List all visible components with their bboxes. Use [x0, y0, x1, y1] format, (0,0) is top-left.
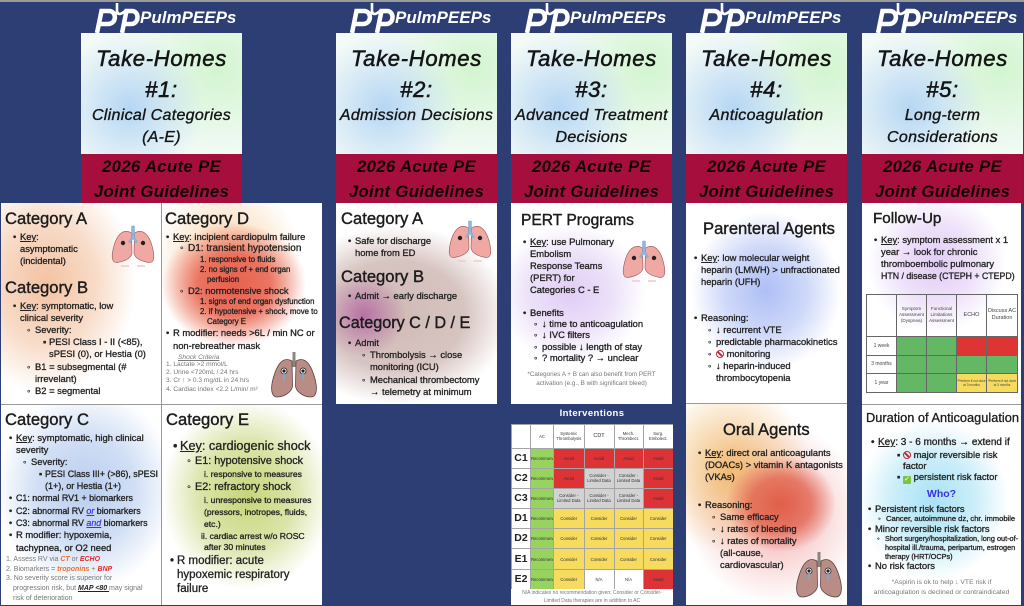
guideline banner: 2026 Acute PE: [532, 157, 651, 176]
text: category E details: hypoxemic respiratory: [177, 569, 289, 581]
guideline banner: 2026 Acute PE: [883, 157, 1002, 176]
text: category B details: B2 = segmental: [35, 385, 100, 396]
heading: category C: Category C: [5, 410, 89, 429]
table: interventions: Consider: [591, 557, 607, 562]
text: oral reasoning: Reasoning:: [705, 499, 752, 510]
text: follow-up key: Key: symptom assessment x 1: [881, 234, 1008, 245]
logo: [862, 2, 1023, 33]
text: category C details: PESI Class III+ (>86), sPESI: [45, 469, 158, 479]
table: interventions: Avoid: [653, 476, 663, 481]
text: category C D E: Admit: [355, 337, 379, 348]
table: interventions: Avoid: [623, 456, 634, 461]
header: take-homes 2: [336, 3, 497, 203]
text: category C notes: [6, 556, 143, 602]
text: category C details: C1: normal RV1 + biomarkers: [16, 493, 133, 503]
text: PERT note: activation (e.g., B with significant bleed): [536, 380, 647, 386]
text: category B details: B1 = subsegmental (#: [35, 361, 126, 372]
title card 3: Take-Homes: [526, 46, 657, 71]
text: risk factors: Persistent risk factors: [875, 503, 965, 514]
text: risk factors: No risk factors: [875, 560, 935, 571]
logo: PulmPEEPs: [570, 8, 666, 27]
heading: category B: Category B: [5, 278, 88, 297]
title card 4: #4:: [750, 77, 783, 102]
table: interventions: [511, 424, 673, 589]
text: category C D E: monitoring (ICU): [370, 361, 439, 372]
table: follow-up schedule: Symptom Assessment (Dyspnea): [899, 306, 924, 323]
panel: duration of anticoagulation: [862, 405, 1021, 605]
text: category B details: irrevelant): [35, 373, 77, 384]
text: parenteral reasoning: Reasoning:: [701, 312, 748, 323]
text: category C notes: 1. Assess RV via CT or ECHO: [6, 556, 100, 563]
table: follow-up schedule: 1 week: [874, 342, 889, 348]
table: follow-up schedule: Discuss AC Duration: [988, 308, 1016, 321]
guideline banner: [511, 154, 672, 203]
text: category B details: sPESI (0), or Hestia (0): [49, 348, 146, 359]
text: PERT key: Key: use Pulmonary: [530, 236, 614, 247]
table: interventions: Consider: [560, 516, 577, 521]
title card 5: Considerations: [887, 129, 998, 146]
heading: category E: Category E: [166, 410, 249, 429]
text: category A key: [20, 231, 78, 243]
text: category D details: 1. signs of end organ dysfunction: [200, 297, 314, 306]
heading: category C D E: Category C / D / E: [339, 314, 470, 332]
text: category D details: Key: incipient cardiopulm failure: [173, 231, 305, 242]
text: category C details: R modifier: hypoxemia,: [16, 529, 112, 540]
text: category E details: [170, 439, 312, 595]
text: category C notes: 2. Biomarkers = troponins + BNP: [6, 566, 112, 573]
title card 3: [511, 33, 672, 154]
text: duration key: major reversible risk: [914, 449, 997, 460]
text: category E details: ii. cardiac arrest w/o ROSC: [201, 531, 305, 541]
heading: parenteral agents: Parenteral Agents: [703, 219, 835, 238]
text: duration key: ✓: [904, 476, 910, 483]
text: benefits: ↓ IVC filters: [542, 329, 590, 340]
text: risk factors: therapy (HRT/OCPs): [885, 552, 953, 561]
table: interventions: Avoid: [653, 577, 663, 582]
guideline banner: Joint Guidelines: [94, 182, 229, 201]
panel: parenteral agents: heparin (LMWH) > unfractionated: [701, 264, 840, 275]
text: category C details: Key: symptomatic, high clinical: [16, 432, 144, 443]
text: category B details: clinical severity: [20, 312, 83, 323]
title card 4: Anticoagulation: [710, 107, 823, 124]
heading: category D: Category D: [165, 209, 249, 228]
heading: PERT programs: PERT Programs: [521, 212, 634, 229]
heading: oral agents: Oral Agents: [723, 420, 810, 439]
title card 1: [81, 33, 242, 154]
text: category D details: D2: normotensive shock: [188, 285, 289, 296]
text: category B: Admit → early discharge: [355, 290, 457, 301]
text: shock criteria: Shock Criteria: [178, 354, 219, 361]
title card 2: #2:: [400, 77, 433, 102]
panel: PERT programs: Embolism: [530, 248, 571, 259]
text: category E details: R modifier: acute: [177, 555, 264, 567]
guideline banner: [81, 154, 242, 203]
panel: categories A and B: asymptomatic: [20, 243, 78, 254]
title card 1: (A-E): [142, 129, 181, 146]
panel: category C: [1, 405, 161, 605]
guideline banner: Joint Guidelines: [524, 182, 659, 201]
text: category E details: after 30 minutes: [204, 542, 266, 552]
table: interventions: Avoid: [653, 496, 663, 501]
table: interventions: Avoid: [564, 456, 574, 461]
text: benefits: ↓ time to anticoagulation: [542, 318, 643, 329]
panel: categories A and B: (incidental): [20, 255, 66, 266]
panel: admission decisions: [336, 203, 497, 404]
panel: categories A and B: [1, 203, 161, 404]
table: follow-up schedule: [866, 294, 1018, 393]
logo: PulmPEEPs: [395, 8, 491, 27]
table: interventions: Consider: [560, 557, 577, 562]
text: oral key: Key: direct oral anticoagulants: [705, 447, 831, 458]
table: interventions: Consider - Limited Data: [587, 493, 611, 503]
guideline banner: 2026 Acute PE: [102, 157, 221, 176]
table: interventions: Consider - Limited Data: [587, 473, 611, 483]
panel: parenteral agents: heparin (UFH): [701, 276, 760, 287]
panel: oral agents: (DOACs) > vitamin K antagonists: [705, 459, 843, 470]
header: take-homes 4: [686, 3, 847, 203]
text: category C details: Severity:: [31, 456, 67, 467]
table: interventions: Consider: [560, 577, 577, 582]
table: interventions: Avoid: [594, 456, 604, 461]
text: PERT note: *Categories A + B can also benefit from PERT: [527, 371, 656, 378]
panel: PERT programs: Categories C - E: [530, 284, 599, 295]
text: duration key: Key: 3 - 6 months → extend if: [878, 437, 1010, 448]
table: interventions: Avoid: [564, 476, 574, 481]
text: category D details: D1: transient hypotension: [188, 243, 301, 254]
title card 1: #1:: [145, 77, 178, 102]
heading: interventions: Interventions: [560, 408, 624, 419]
text: benefits: Benefits: [530, 307, 564, 318]
text: category E details: i. unresponsive to measures: [204, 495, 311, 505]
logo: [81, 2, 242, 33]
text: risk factors: Cancer, autoimmune dz, chr. immobile: [886, 514, 1015, 523]
table: follow-up schedule: 3 months: [871, 361, 892, 367]
icon: sad lungs: [796, 552, 842, 598]
table: interventions: C3: [514, 492, 528, 504]
header: take-homes 5: [862, 3, 1023, 203]
panel: oral agents: (VKAs): [705, 471, 735, 482]
text: oral reasoning: [698, 499, 797, 570]
text: category C details: C3: abnormal RV and biomarkers: [16, 518, 148, 528]
text: category C details: (1+), or Hestia (1+): [45, 481, 121, 491]
table: interventions: Consider - Limited Data: [617, 493, 640, 503]
text: category C details: severity: [16, 444, 48, 455]
text: oral reasoning: cardiovascular): [720, 559, 784, 570]
text: parenteral reasoning: monitoring: [727, 348, 770, 359]
logo: PulmPEEPs: [140, 8, 236, 27]
table: interventions: Consider - Limited Data: [617, 473, 640, 483]
text: PERT note: [527, 371, 656, 386]
guideline banner: Joint Guidelines: [875, 182, 1010, 201]
title card 3: Decisions: [555, 129, 628, 146]
panel: category D: [162, 203, 322, 404]
text: benefits: ? mortality ? → unclear: [542, 352, 638, 363]
text: table footnote: [511, 589, 673, 605]
text: aspirin note: [874, 579, 1009, 596]
table: interventions: AC: [539, 434, 545, 439]
panel: admission decisions: home from ED: [355, 247, 415, 258]
text: category E details: etc.): [204, 519, 221, 529]
panel backing: column 4: [686, 203, 847, 605]
table: interventions: Surg. Embolect.: [649, 431, 668, 441]
text: benefits: [523, 307, 643, 364]
logo: [686, 2, 847, 33]
table: interventions: Consider - Limited Data: [557, 493, 580, 503]
table: interventions: Mech. Thrombect.: [618, 431, 639, 441]
table: interventions: C2: [514, 472, 528, 484]
text: duration key: factor: [903, 460, 926, 471]
text: table footnote: N/A indicates no recommendation given; Consider or Consider-: [522, 590, 662, 596]
logo: PulmPEEPs: [921, 8, 1017, 27]
text: category A: Safe for discharge: [355, 235, 431, 246]
text: category D details: 2. no signs of + end organ: [200, 265, 290, 274]
table: interventions: Consider: [650, 536, 667, 541]
text: category C D E: Thrombolysis → close: [370, 349, 462, 360]
text: oral reasoning: ↓ rates of mortality: [720, 535, 797, 546]
text: oral reasoning: ↓ rates of bleeding: [720, 523, 797, 534]
text: category B details: [13, 300, 146, 396]
table: interventions: D2: [514, 532, 528, 544]
text: risk factors: [868, 503, 1018, 571]
panel: parenteral agents: [686, 203, 847, 403]
text: category A key: Key:: [20, 231, 39, 242]
text: risk factors: hospital ill./trauma, peripartum, estrogen: [885, 543, 1015, 552]
guideline banner: Joint Guidelines: [699, 182, 834, 201]
guideline banner: [336, 154, 497, 203]
top edge: [0, 0, 1024, 2]
panel: interventions table: [511, 404, 673, 605]
text: category D details: 1. responsive to fluids: [200, 255, 275, 264]
table: interventions: Consider: [620, 536, 637, 541]
text: shock criteria: 2. Urine <720mL / 24 hrs: [166, 369, 239, 376]
text: category E details: (pressors, inotropes, fluids,: [204, 507, 307, 517]
guideline banner: 2026 Acute PE: [707, 157, 826, 176]
table: interventions: E1: [515, 553, 527, 565]
heading: category B: Category B: [341, 267, 424, 286]
table: interventions: Consider: [620, 516, 637, 521]
icon: happy lungs: [622, 240, 666, 282]
table: follow-up schedule: *Perform if not done at 3 months: [957, 378, 986, 386]
header: take-homes 3: [511, 3, 672, 203]
table: interventions: Consider: [591, 516, 607, 521]
table: interventions: N/A: [625, 577, 632, 582]
table: interventions: D1: [514, 512, 528, 524]
text: category C notes: risk of deterioration: [13, 595, 73, 602]
logo: [336, 2, 497, 33]
text: risk factors: Minor reversible risk factors: [875, 523, 990, 534]
text: parenteral reasoning: predictable pharmacokinetics: [716, 336, 837, 347]
table: interventions: Consider: [620, 557, 637, 562]
text: category D details: non-rebreather mask: [173, 340, 260, 351]
text: aspirin note: anticoagulation is declined or contraindicated: [874, 588, 1009, 596]
heading: duration of anticoagulation: Duration of Anticoagulation: [866, 410, 1019, 425]
title card 5: [862, 33, 1023, 154]
heading: follow-up: Follow-Up: [873, 210, 941, 227]
table: interventions: E2: [515, 573, 527, 585]
icon: sad lungs: [271, 352, 317, 398]
text: category C details: C2: abnormal RV or biomarkers: [16, 506, 141, 516]
title card 1: Clinical Categories: [92, 107, 231, 124]
panel backing: column 5: [862, 203, 1021, 605]
table: interventions: Consider: [650, 516, 667, 521]
text: parenteral key: Key: low molecular weight: [701, 252, 809, 263]
logo: PulmPEEPs: [745, 8, 841, 27]
text: category C D E: [348, 337, 480, 398]
table: interventions: Consider: [591, 536, 607, 541]
title card 3: Advanced Treatment: [515, 107, 668, 124]
table: follow-up schedule: 1 year: [875, 380, 888, 386]
title card 2: [336, 33, 497, 154]
text: duration key: [871, 437, 1010, 484]
text: category E details: failure: [177, 583, 208, 595]
table: follow-up schedule: ECHO: [964, 312, 979, 318]
text: aspirin note: *Aspirin is ok to help ↓ VTE risk if: [892, 579, 991, 586]
text: parenteral reasoning: [694, 312, 838, 384]
heading: category A: Category A: [5, 209, 87, 228]
title card 4: [686, 33, 847, 154]
title card 2: Admission Decisions: [340, 107, 493, 124]
heading: who: Who?: [927, 488, 956, 500]
text: category D details: R modifier: needs >6L / min NC or: [173, 327, 315, 338]
text: shock criteria: 4. Cardiac index <2.2 L/min/ m²: [166, 386, 258, 393]
text: category E details: E2: refractory shock: [195, 481, 291, 493]
panel: follow-up: year → look for chronic: [881, 246, 977, 257]
table: interventions: N/A: [596, 577, 602, 582]
heading: interventions: [511, 404, 673, 424]
text: category C notes: 3. No severity score is superior for: [6, 575, 112, 582]
text: category D details: [166, 231, 318, 351]
panel backing: column 1: [1, 203, 322, 605]
text: category B details: Severity:: [35, 324, 71, 335]
table: follow-up schedule: *Perform if not done at 3 months: [988, 378, 1016, 386]
text: shock criteria: [166, 354, 258, 393]
text: category B details: PESI Class I - II (<85),: [49, 336, 143, 347]
text: parenteral reasoning: ↓ heparin-induced: [716, 360, 791, 371]
title card 5: Take-Homes: [877, 46, 1008, 71]
panel: PERT programs: Response Teams: [530, 260, 602, 271]
icon: happy lungs: [112, 226, 154, 267]
title card 1: Take-Homes: [96, 46, 227, 71]
panel: follow-up: [862, 203, 1021, 404]
text: risk factors: Short surgery/hospitalization, long out-of-: [885, 534, 1018, 543]
table: interventions: Consider: [560, 536, 577, 541]
text: shock criteria: 3. Cr ↑ > 0.3 mg/dL in 24 hrs: [166, 377, 249, 384]
text: category E details: i. responsive to measures: [204, 469, 302, 479]
text: category D details: perfusion: [207, 275, 239, 284]
text: category C notes: progression risk, but MAP <80 may signal: [13, 585, 143, 592]
panel: PERT programs: (PERT) for: [530, 272, 575, 283]
text: benefits: possible ↓ length of stay: [542, 341, 642, 352]
title card 3: #3:: [575, 77, 608, 102]
text: category C details: [9, 432, 158, 554]
text: category C D E: Mechanical thrombectomy: [370, 374, 479, 385]
text: category C D E: → telemetry at minimum: [370, 386, 472, 397]
panel: PERT programs: [511, 203, 672, 404]
text: oral reasoning: Same efficacy: [720, 511, 779, 522]
text: parenteral reasoning: thrombocytopenia: [716, 372, 791, 383]
text: shock criteria: 1. Lactate >2 mmol/L: [166, 361, 228, 368]
table: interventions: Systemic Thrombolysis: [556, 431, 581, 441]
table: interventions: Avoid: [653, 456, 663, 461]
table: follow-up schedule: Functional Limitations Assessment: [929, 306, 954, 323]
text: category B details: Key: symptomatic, low: [20, 300, 113, 311]
text: table footnote: Limited Data therapies are in addition to AC: [544, 598, 640, 604]
text: duration key: persistent risk factor: [914, 471, 998, 482]
text: category D details: Category E: [207, 317, 246, 326]
title card 5: Long-term: [905, 107, 980, 124]
text: category D details: 2. if hypotensive + shock, move to: [200, 307, 318, 316]
guideline banner: 2026 Acute PE: [357, 157, 476, 176]
icon: happy lungs: [448, 220, 492, 262]
panel: category E: [162, 405, 322, 605]
guideline banner: [862, 154, 1023, 203]
heading: category A: Category A: [341, 209, 423, 228]
panel: follow-up: thromboembolic pulmonary: [881, 258, 994, 269]
table: interventions: CDT: [593, 433, 605, 439]
table: interventions: Consider: [650, 557, 667, 562]
text: parenteral reasoning: ↓ recurrent VTE: [716, 324, 782, 335]
header: take-homes 1: [81, 3, 242, 203]
panel: oral agents: [686, 404, 847, 605]
text: oral reasoning: (all-cause,: [720, 547, 763, 558]
title card 4: Take-Homes: [701, 46, 832, 71]
panel: follow-up: HTN / disease (CTEPH + CTEPD): [881, 271, 1015, 281]
table: interventions: C1: [514, 452, 528, 464]
text: category C details: tachypnea, or O2 need: [16, 542, 111, 553]
title card 2: Take-Homes: [351, 46, 482, 71]
text: category E details: Key: cardiogenic shock: [180, 439, 310, 453]
guideline banner: [686, 154, 847, 203]
title card 5: #5:: [926, 77, 959, 102]
logo: [511, 2, 672, 33]
text: category E details: E1: hypotensive shock: [195, 455, 303, 467]
guideline banner: Joint Guidelines: [349, 182, 484, 201]
